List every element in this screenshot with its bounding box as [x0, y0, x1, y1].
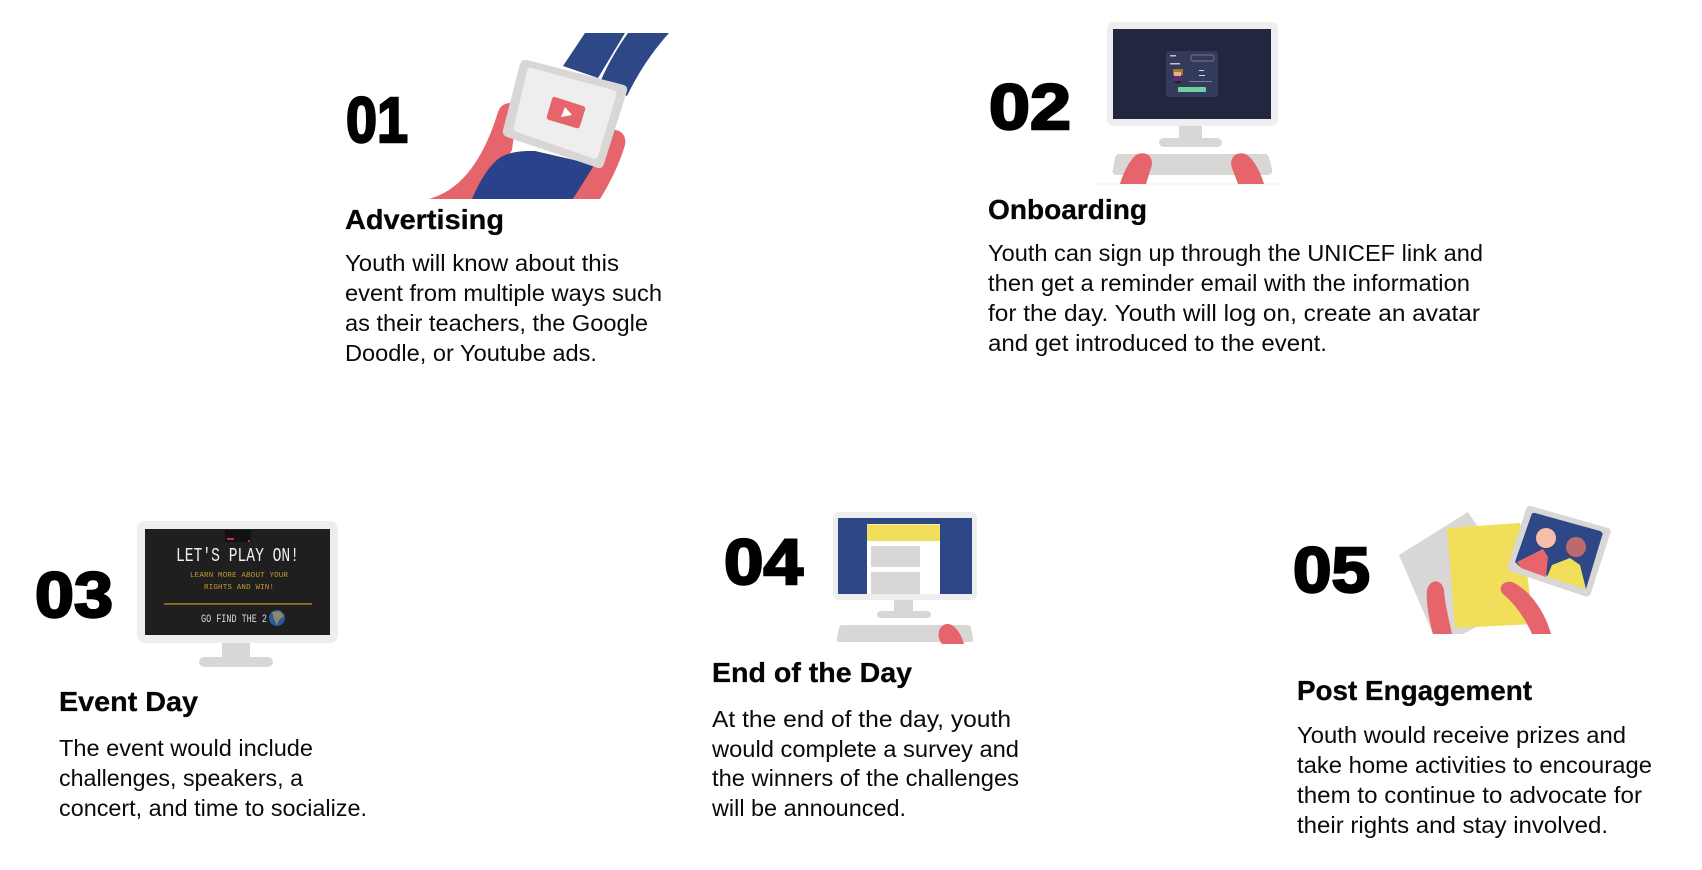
text block: post engagement description: them to continue to advocate for — [1297, 782, 1642, 808]
heading: Event Day: Event Day — [59, 686, 198, 717]
icon: monitor showing event screen — [137, 521, 338, 667]
panel: step 02 onboarding — [988, 22, 1483, 356]
text block: event day description — [59, 735, 367, 821]
text block: post engagement description — [1297, 722, 1652, 838]
panel: step 03 event day — [35, 521, 367, 821]
text block: advertising description: Doodle, or Youtube ads. — [345, 340, 597, 366]
text block: event day description: challenges, speakers, a — [59, 765, 304, 791]
heading: Onboarding: Onboarding — [988, 194, 1147, 225]
text block: advertising description: event from multiple ways such — [345, 280, 662, 306]
number 03: 03 — [35, 559, 113, 631]
panel: step 04 end of the day — [711, 512, 1019, 821]
number 02: 02 — [989, 71, 1071, 143]
icon: hands holding tablet with video ad — [429, 33, 669, 199]
text block: post engagement description: take home activities to encourage — [1297, 752, 1652, 778]
number 01: 01 — [346, 84, 408, 156]
panel: step 01 advertising — [345, 33, 669, 366]
heading: Advertising: Advertising — [345, 204, 504, 235]
number 04: 04 — [724, 526, 803, 598]
text block: advertising description — [345, 250, 662, 366]
text block: onboarding description: for the day. Youth will log on, create an avatar — [988, 300, 1480, 326]
number 05: 05 — [1293, 534, 1370, 606]
text block: advertising description: as their teachers, the Google — [345, 310, 648, 336]
text block: post engagement description: Youth would receive prizes and — [1297, 722, 1626, 748]
text block: end of day description: would complete a survey and — [711, 736, 1019, 762]
text block: onboarding description — [988, 240, 1483, 356]
text block: event day description: concert, and time to socialize. — [59, 795, 367, 821]
text block: onboarding description: Youth can sign up through the UNICEF link and — [988, 240, 1483, 266]
icon: hands holding papers and photo — [1399, 506, 1611, 634]
text block: onboarding description: then get a reminder email with the information — [988, 270, 1470, 296]
text block: event day description: The event would include — [59, 735, 313, 761]
heading: End of the Day: End of the Day — [712, 657, 912, 688]
icon: monitor showing event screen: LET'S PLAY ON! — [176, 545, 299, 567]
text block: end of day description — [711, 706, 1019, 821]
text block: end of day description: will be announced. — [711, 795, 906, 821]
text block: onboarding description: and get introduced to the event. — [988, 330, 1327, 356]
text block: end of day description: the winners of the challenges — [712, 765, 1019, 791]
text block: advertising description: Youth will know about this — [345, 250, 619, 276]
panel: step 05 post engagement — [1293, 506, 1652, 838]
text block: end of day description: At the end of the day, youth — [712, 706, 1011, 732]
icon: monitor showing survey page — [833, 512, 977, 644]
icon: monitor showing event screen: RIGHTS AND WIN! — [204, 584, 274, 592]
heading: Post Engagement: Post Engagement — [1297, 675, 1532, 706]
text block: post engagement description: their rights and stay involved. — [1297, 812, 1608, 838]
icon: monitor showing event screen: GO FIND THE 2 — [201, 614, 267, 626]
icon: monitor with avatar sign-up screen — [1095, 22, 1280, 184]
icon: monitor showing event screen: LEARN MORE ABOUT YOUR — [190, 572, 288, 580]
